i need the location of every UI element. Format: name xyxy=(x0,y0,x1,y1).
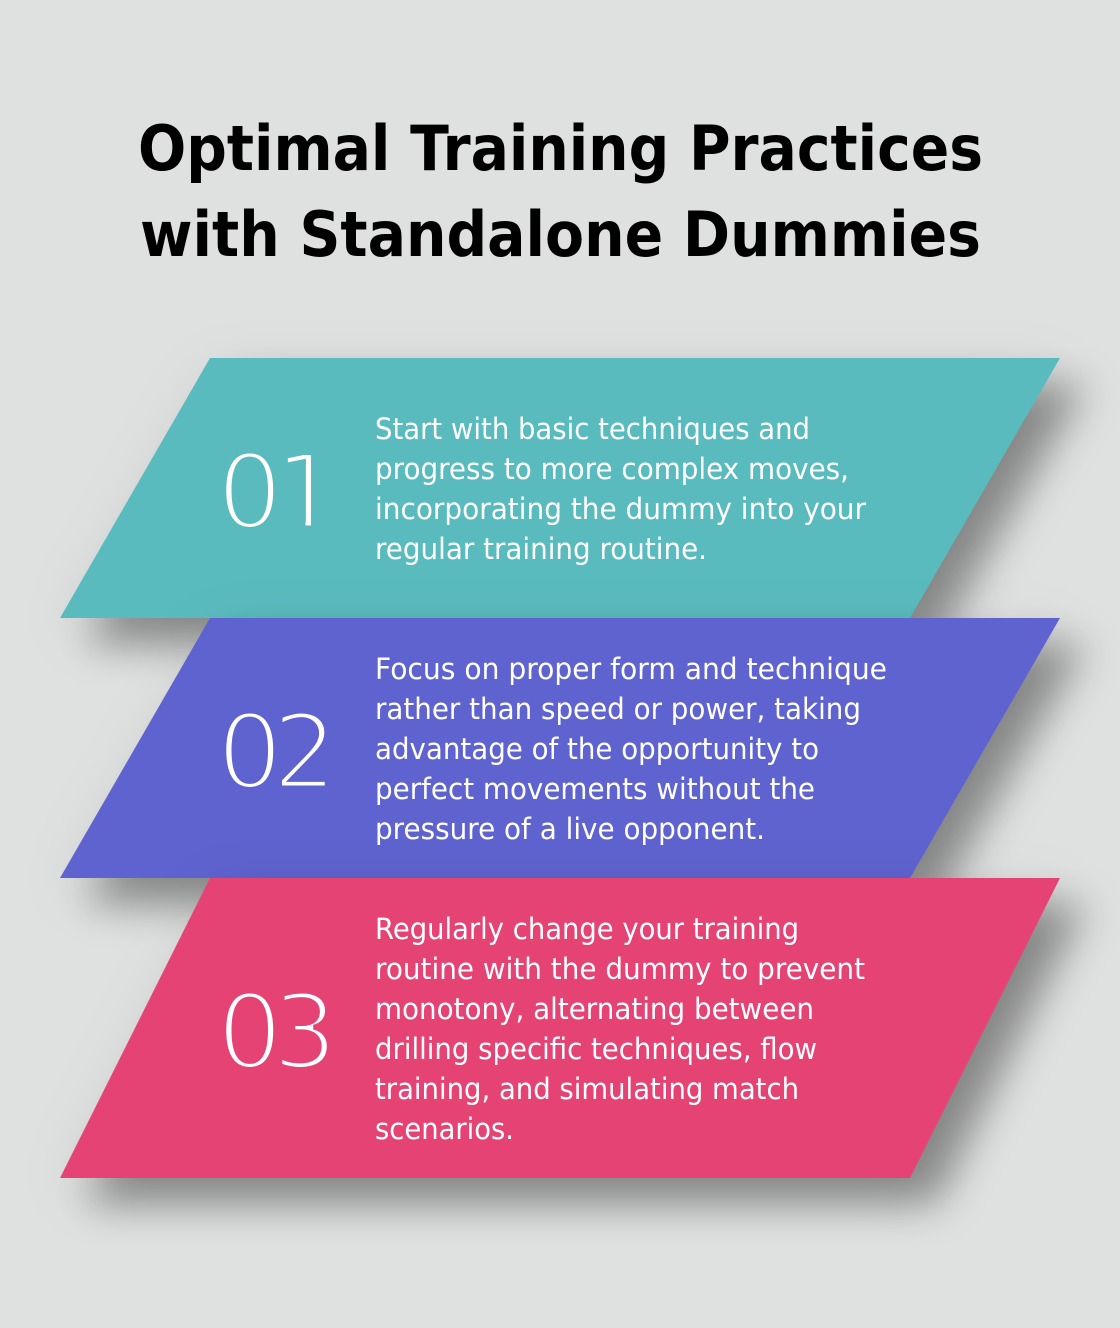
text block: step 03: Regularly change your training xyxy=(375,912,799,946)
panel: step 03 xyxy=(60,878,1060,1178)
number 03: 03 xyxy=(217,973,338,1093)
text block: step 01: regular training routine. xyxy=(375,532,707,566)
text block: step 02: rather than speed or power, taking xyxy=(375,692,861,726)
text block: step 03: scenarios. xyxy=(375,1112,514,1146)
panel: step 01 xyxy=(60,358,1060,618)
number 01: 01 xyxy=(217,433,340,553)
text block: step 01: progress to more complex moves, xyxy=(375,452,849,486)
text block: step 02: Focus on proper form and technique xyxy=(375,652,887,686)
text block: step 03 xyxy=(375,912,865,1146)
text block: step 03: routine with the dummy to prevent xyxy=(375,952,865,986)
text block: step 03: training, and simulating match xyxy=(375,1072,799,1106)
title xyxy=(138,112,983,271)
text block: step 03: drilling specific techniques, flow xyxy=(375,1032,817,1066)
text block: step 01: Start with basic techniques and xyxy=(375,412,810,446)
number 02: 02 xyxy=(217,693,338,813)
text block: step 01 xyxy=(375,412,866,566)
title: Optimal Training Practices xyxy=(138,112,983,185)
text block: step 02: advantage of the opportunity to xyxy=(375,732,819,766)
text block: step 03: monotony, alternating between xyxy=(375,992,814,1026)
text block: step 02 xyxy=(375,652,887,846)
parallelogram: indigo band xyxy=(60,618,1060,878)
text block: step 01: incorporating the dummy into your xyxy=(375,492,866,526)
text block: step 02: pressure of a live opponent. xyxy=(375,812,765,846)
parallelogram: teal band xyxy=(60,358,1060,618)
parallelogram: pink band xyxy=(60,878,1060,1178)
panel: step 02 xyxy=(60,618,1060,878)
text block: step 02: perfect movements without the xyxy=(375,772,815,806)
title: with Standalone Dummies xyxy=(140,198,981,271)
